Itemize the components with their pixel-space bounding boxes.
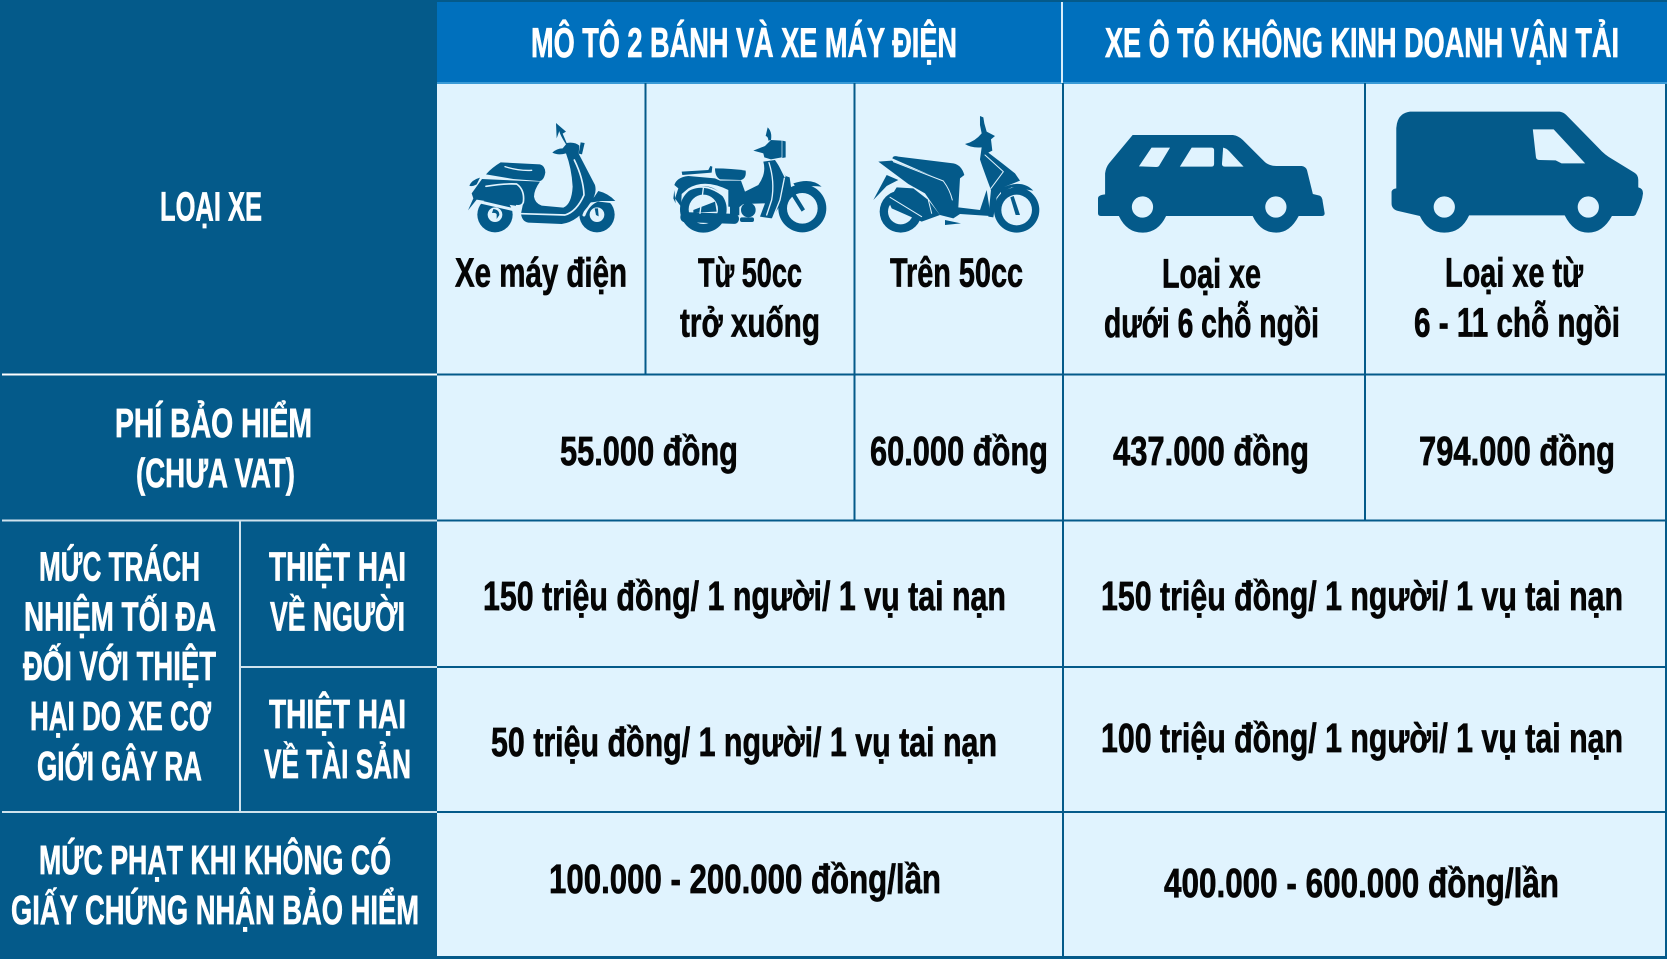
label: car under 6 seats: [1104, 250, 1319, 346]
icon: small motorbike: [673, 127, 826, 233]
row heading: insurance fee: (CHƯA VAT): [136, 450, 295, 496]
row heading: maximum liability: NHIỆM TỐI ĐA: [24, 594, 216, 640]
label: up to 50cc: Từ 50cc: [698, 250, 802, 296]
label: up to 50cc: [680, 250, 820, 346]
row heading: maximum liability: MỨC TRÁCH: [39, 544, 200, 590]
heading: motorbikes column: MÔ TÔ 2 BÁNH VÀ XE MÁY ĐIỆN: [531, 18, 957, 66]
row heading: damage to people: VỀ NGƯỜI: [270, 594, 405, 640]
row heading: fine without certificate: [11, 837, 419, 933]
value: fee 437.000: 437.000 đồng: [1113, 428, 1309, 474]
icon: van: [1392, 112, 1643, 233]
row heading: damage to property: VỀ TÀI SẢN: [264, 741, 411, 787]
value: motorbike people liability: 150 triệu đồng/ 1 người/ 1 vụ tai nạn: [483, 573, 1006, 619]
label: car 6 to 11 seats: [1414, 250, 1620, 346]
value: car fine: 400.000 - 600.000 đồng/lần: [1164, 860, 1559, 906]
value: motorbike property liability: 50 triệu đồng/ 1 người/ 1 vụ tai nạn: [491, 719, 997, 765]
value: fee 60.000: 60.000 đồng: [870, 428, 1048, 474]
icon: electric scooter: [468, 123, 617, 232]
row heading: maximum liability: GIỚI GÂY RA: [37, 743, 202, 789]
row heading: maximum liability: HẠI DO XE CƠ: [30, 693, 211, 739]
label: up to 50cc: trở xuống: [680, 300, 820, 346]
icon: car: [1098, 135, 1325, 233]
value: fee 55.000: 55.000 đồng: [560, 428, 738, 474]
label: car under 6 seats: dưới 6 chỗ ngồi: [1104, 300, 1319, 346]
row heading: damage to property: [264, 691, 411, 787]
row heading: maximum liability: ĐỐI VỚI THIỆT: [23, 643, 216, 689]
row heading: vehicle type: LOẠI XE: [160, 184, 262, 230]
row heading: damage to property: THIỆT HẠI: [269, 691, 406, 737]
row heading: fine without certificate: GIẤY CHỨNG NHẬN BẢO HIỂM: [11, 886, 419, 933]
label: electric scooter: Xe máy điện: [455, 250, 627, 296]
row heading: maximum liability: [23, 544, 216, 789]
panel: blue header band: [437, 2, 1667, 83]
label: car 6 to 11 seats: Loại xe từ: [1445, 250, 1583, 296]
label: car under 6 seats: Loại xe: [1162, 250, 1261, 296]
icon: scooter above 50cc: [873, 116, 1039, 233]
row heading: insurance fee: PHÍ BẢO HIỂM: [115, 399, 312, 446]
row heading: insurance fee: [115, 399, 312, 496]
row heading: fine without certificate: MỨC PHẠT KHI KHÔNG CÓ: [39, 837, 391, 883]
label: above 50cc: Trên 50cc: [890, 250, 1023, 296]
row heading: damage to people: THIỆT HẠI: [269, 544, 406, 590]
row heading: damage to people: [269, 544, 406, 640]
value: motorbike fine: 100.000 - 200.000 đồng/lần: [549, 856, 941, 902]
